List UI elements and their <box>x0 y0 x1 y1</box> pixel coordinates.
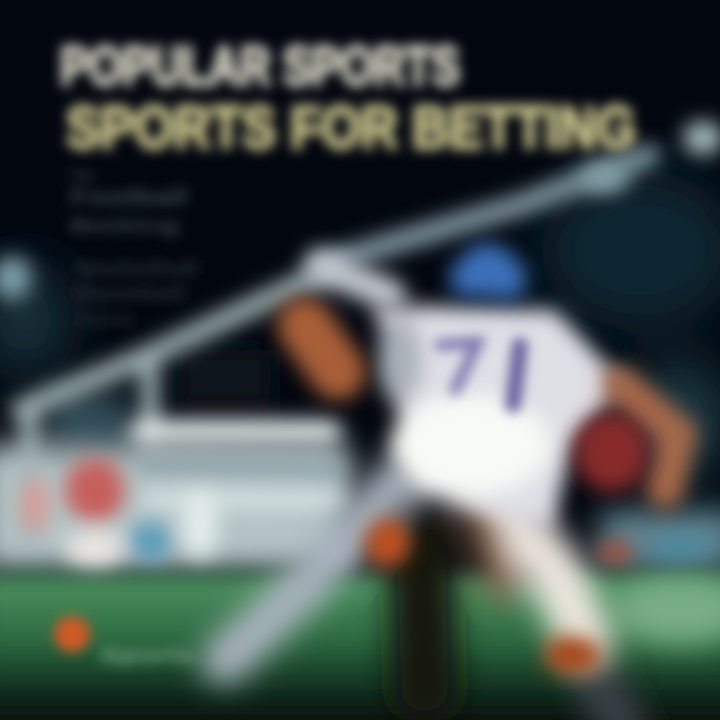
player helmet <box>448 242 528 300</box>
logo caption: Sports <box>100 645 195 667</box>
light spots <box>0 121 720 300</box>
football <box>574 412 650 492</box>
player <box>225 242 678 720</box>
orange wrist band <box>366 519 410 567</box>
player right arm <box>620 385 678 490</box>
player arm left <box>305 265 390 372</box>
subtitle text block: Betting <box>70 216 180 236</box>
subtitle text block: Football <box>70 184 188 211</box>
field <box>0 574 720 720</box>
player torso jersey <box>375 305 625 530</box>
secondary text block <box>76 258 198 329</box>
subtitle text block: The <box>70 167 95 183</box>
jersey number 11 <box>440 342 520 405</box>
logo: orange mark <box>54 616 90 652</box>
title: SPORTS FOR BETTING <box>66 94 636 161</box>
title: POPULAR SPORTS <box>60 34 460 97</box>
crowd colour spots <box>21 458 710 566</box>
title <box>60 34 636 161</box>
orange cleat <box>544 637 600 673</box>
background glow: stands <box>0 170 720 480</box>
field highlight right <box>610 575 720 645</box>
secondary text block: Basketball <box>76 258 198 280</box>
stadium floodlight rail <box>20 155 650 540</box>
player legs <box>225 480 625 720</box>
secondary text block: Baseball <box>76 283 186 305</box>
secondary text block: Tennis <box>76 312 136 329</box>
subtitle text block <box>70 167 188 236</box>
stadium stands <box>0 350 720 570</box>
